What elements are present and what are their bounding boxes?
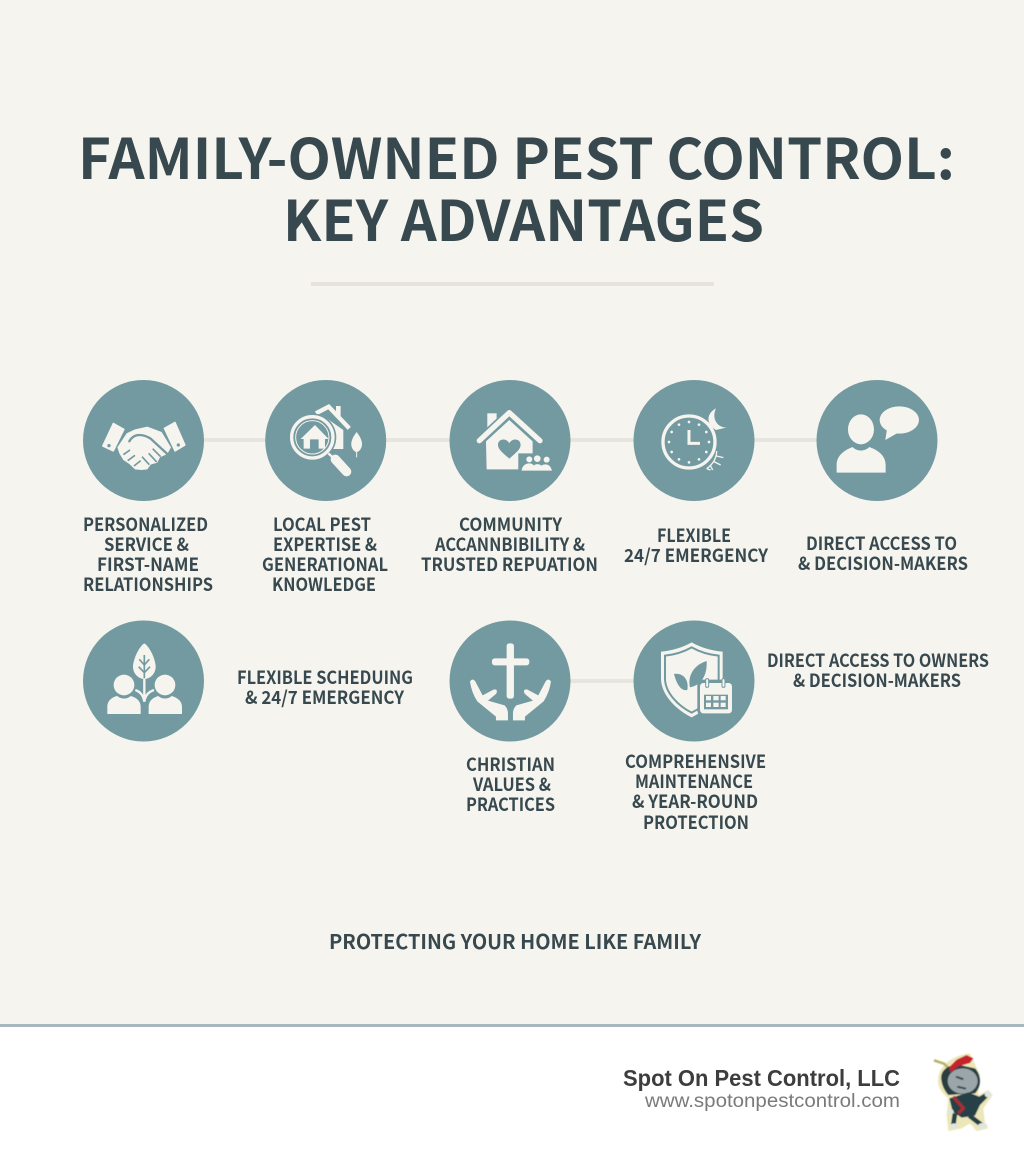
label: personalized service: PERSONALIZED: [83, 511, 208, 537]
label: comprehensive maintenance: PROTECTION: [643, 809, 749, 835]
title: FAMILY-OWNED PEST CONTROL:: [78, 115, 955, 196]
label: local pest expertise: KNOWLEDGE: [272, 571, 376, 597]
label: direct access short: & DECISION-MAKERS: [798, 550, 968, 576]
label: direct access to owners: DIRECT ACCESS TO OWNERS: [767, 647, 989, 673]
label: community: ACCANNBIBILITY &: [434, 531, 585, 557]
label: christian values: PRACTICES: [466, 791, 555, 817]
label: personalized service: [83, 511, 213, 597]
label: community: [421, 511, 598, 577]
label: christian values: CHRISTIAN: [466, 751, 555, 777]
label: flexible scheduling: & 24/7 EMERGENCY: [245, 684, 405, 710]
footer band: [0, 1024, 1024, 1154]
icon: shield with leaves and calendar: [634, 620, 754, 742]
icon: person with speech bubble: [816, 380, 938, 501]
label: local pest expertise: LOCAL PEST: [273, 511, 371, 537]
label: community: TRUSTED REPUATION: [421, 551, 598, 577]
label: personalized service: FIRST-NAME: [97, 551, 199, 577]
icon: cross and hands: [450, 620, 570, 742]
label: flexible 24/7: FLEXIBLE: [657, 522, 731, 548]
label: comprehensive maintenance: [625, 748, 766, 835]
label: local pest expertise: EXPERTISE &: [273, 531, 377, 557]
label: local pest expertise: [262, 511, 388, 597]
footer website: www.spotonpestcontrol.com: [644, 1091, 900, 1112]
label: comprehensive maintenance: & YEAR-ROUND: [632, 788, 758, 814]
label: flexible 24/7: 24/7 EMERGENCY: [624, 542, 769, 568]
icon: magnifier and house: [265, 380, 386, 501]
label: direct access short: [798, 530, 968, 576]
icon: mascot: [934, 1053, 993, 1131]
icon: handshake: [83, 380, 204, 501]
label: flexible 24/7: [624, 522, 769, 568]
label: flexible scheduling: FLEXIBLE SCHEDUING: [237, 664, 413, 690]
label: local pest expertise: GENERATIONAL: [262, 551, 388, 577]
footer company name: Spot On Pest Control, LLC: [623, 1065, 900, 1091]
label: direct access to owners: & DECISION-MAKERS: [793, 667, 961, 693]
label: christian values: [466, 751, 555, 817]
label: comprehensive maintenance: COMPREHENSIVE: [625, 748, 766, 774]
icon: family with plant: [83, 620, 204, 742]
label: christian values: VALUES &: [472, 771, 551, 797]
icon: clock with moon and sun: [634, 380, 754, 501]
label: direct access short: DIRECT ACCESS TO: [806, 530, 957, 556]
label: comprehensive maintenance: MAINTENANCE: [635, 768, 753, 794]
title: KEY ADVANTAGES: [283, 177, 764, 258]
label: flexible scheduling: [237, 664, 413, 710]
label: community: COMMUNITY: [459, 511, 563, 537]
label: direct access to owners: [767, 647, 989, 693]
title: [78, 115, 955, 258]
label: personalized service: RELATIONSHIPS: [83, 571, 213, 597]
icon: house with heart and family: [450, 380, 570, 501]
tagline: PROTECTING YOUR HOME LIKE FAMILY: [329, 926, 701, 955]
label: personalized service: SERVICE &: [104, 531, 189, 557]
